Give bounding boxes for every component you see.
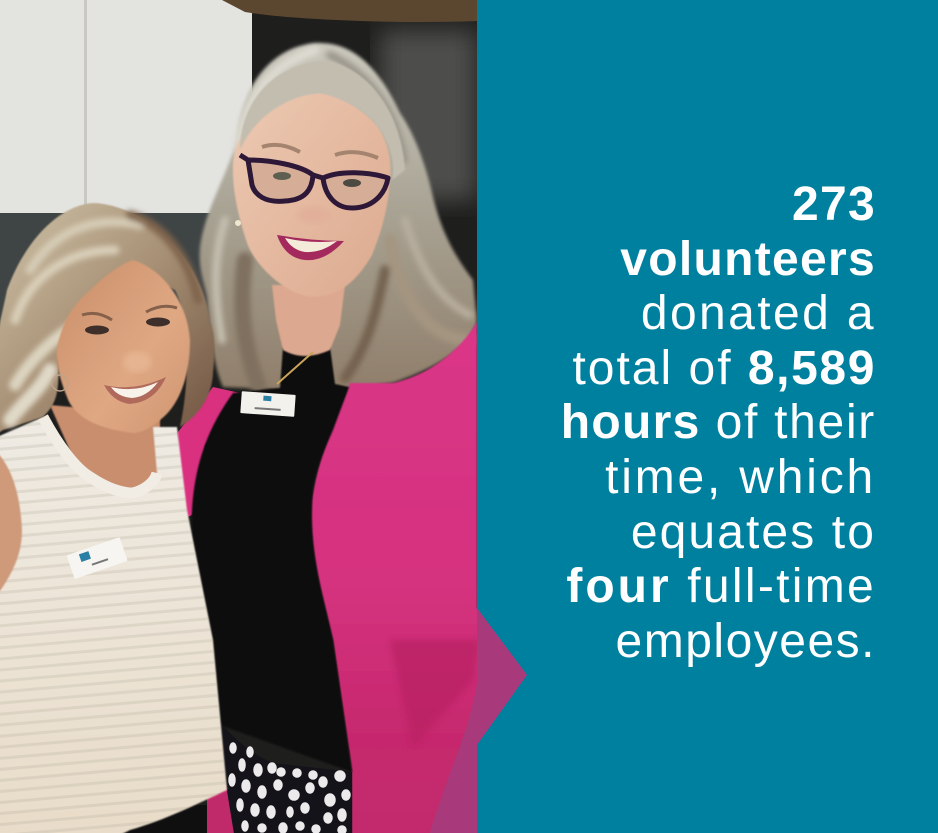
left woman: black lower garment — [125, 805, 207, 833]
right woman: cardigan fold and sleeve — [390, 600, 527, 833]
text block: volunteer statistic — [561, 178, 876, 668]
right woman: left cardigan panel — [178, 387, 240, 520]
photo: two smiling volunteers with arrow-shaped edge — [0, 0, 527, 833]
right woman: smile — [277, 235, 344, 260]
text block: volunteer statistic: time, which — [605, 451, 876, 504]
right woman: eyebrows — [262, 145, 378, 158]
left woman: face — [57, 260, 190, 433]
right woman: hair strands — [216, 50, 470, 385]
right woman: neck — [272, 285, 345, 356]
left woman: tank stripes — [0, 417, 227, 833]
right woman: earring — [235, 220, 241, 226]
left woman: hair highlights — [10, 215, 198, 420]
left woman: hoop earring — [52, 375, 68, 391]
left woman: tank collar — [43, 417, 157, 493]
left woman: eyes — [85, 318, 170, 334]
text block: volunteer statistic: volunteers — [620, 233, 876, 286]
right woman: nose shadow — [302, 210, 308, 216]
text block: volunteer statistic: four full-time — [566, 560, 876, 613]
photo background: kitchen cabinets — [0, 0, 477, 833]
right woman: name tag — [240, 391, 296, 417]
text block: volunteer statistic: hours of their — [561, 396, 876, 449]
left woman: name tag — [67, 537, 128, 579]
left woman: eyebrows — [82, 306, 177, 320]
right woman: glasses — [240, 155, 388, 208]
right woman: hair — [200, 43, 477, 392]
text block: volunteer statistic: donated a — [641, 287, 876, 340]
left woman: bare arm — [0, 450, 22, 598]
right woman: patterned skirt — [220, 722, 352, 833]
text block: volunteer statistic: 273 — [792, 178, 876, 231]
right woman: face — [233, 93, 391, 297]
right woman: pink cardigan — [311, 322, 527, 833]
right woman: lower left cardigan — [207, 785, 235, 833]
text block: volunteer statistic: employees. — [616, 615, 876, 668]
left woman: smile — [104, 377, 166, 404]
left woman: hair — [0, 203, 214, 435]
right woman: hair over forehead — [240, 60, 405, 180]
left woman: neck — [50, 404, 161, 488]
left woman: white tank top — [0, 417, 227, 833]
left woman: nose highlight — [123, 352, 151, 372]
text block: volunteer statistic: equates to — [631, 506, 876, 559]
text block: volunteer statistic: total of 8,589 — [572, 342, 876, 395]
right woman: necklace — [277, 352, 313, 384]
right woman: black top — [192, 347, 352, 772]
